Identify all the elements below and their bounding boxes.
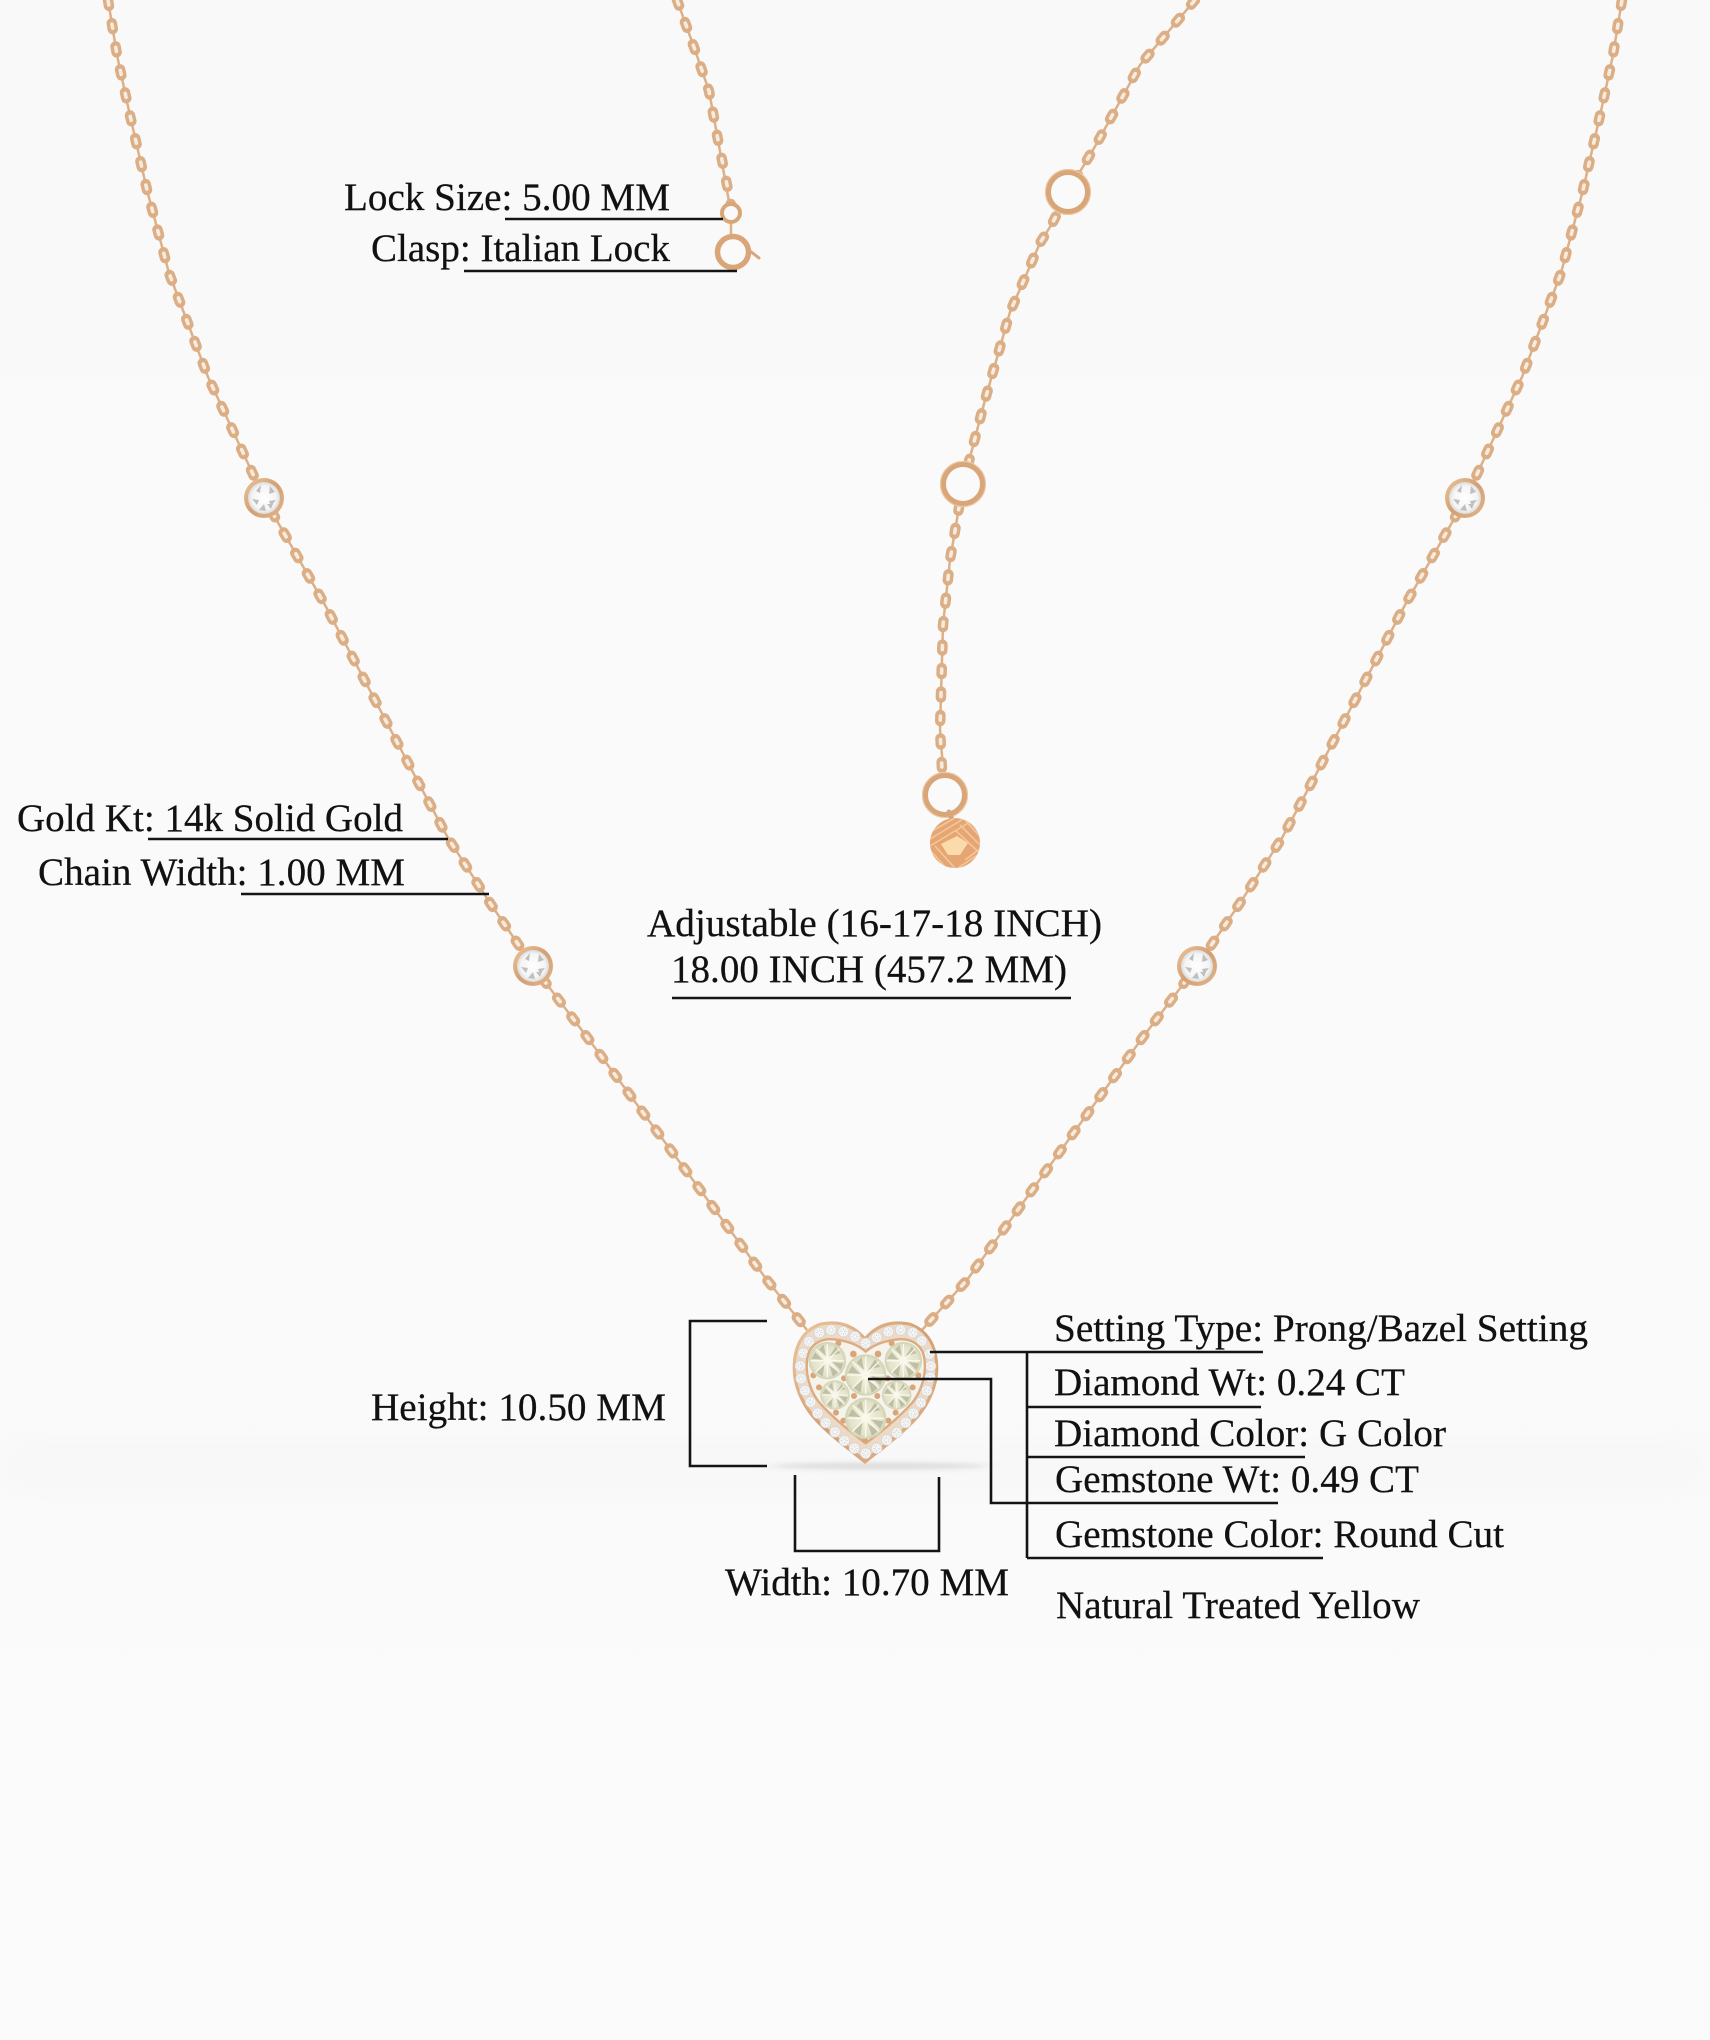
label: adjustable length: 18.00 INCH (457.2 MM) xyxy=(671,948,1067,991)
necklace specification infographic xyxy=(18,0,1628,1619)
bezel diamond: upper right xyxy=(1445,478,1485,518)
label: clasp: Clasp: Italian Lock xyxy=(371,227,670,270)
label: gemstone weight: Gemstone Wt: 0.49 CT xyxy=(1055,1458,1419,1501)
heart pendant xyxy=(793,1321,938,1464)
bezel diamond: lower left xyxy=(513,946,553,986)
icon: extender ring 1 xyxy=(1046,170,1090,214)
label: setting type: Setting Type: Prong/Bazel Setting xyxy=(1054,1307,1588,1350)
label: diamond weight: Diamond Wt: 0.24 CT xyxy=(1054,1361,1405,1404)
label: chain width: Chain Width: 1.00 MM xyxy=(38,851,405,894)
icon: extender ring 3 xyxy=(922,772,968,818)
icon: small jump ring at clasp xyxy=(722,204,740,222)
label: height with bracket: Height: 10.50 MM xyxy=(371,1386,666,1429)
label: width with bracket xyxy=(725,1475,1009,1604)
heart frame xyxy=(793,1321,938,1464)
icon: logo charm disc xyxy=(930,810,980,868)
icon: spring ring clasp xyxy=(718,236,759,268)
leader lines to setting and stones xyxy=(868,1352,1278,1558)
label: gemstone color: Gemstone Color: Round Cut xyxy=(1055,1513,1504,1556)
large gemstones xyxy=(809,1342,922,1439)
chain: clasp strand xyxy=(677,0,731,235)
label: natural treated yellow: Natural Treated Yellow xyxy=(1056,1584,1420,1627)
label: height with bracket xyxy=(371,1321,767,1466)
bezel diamond: lower right xyxy=(1177,946,1217,986)
prongs xyxy=(810,1340,921,1443)
label: lock size: Lock Size: 5.00 MM xyxy=(344,176,670,219)
halo of melee diamonds xyxy=(795,1324,936,1459)
chain: adjustable extender strand xyxy=(940,0,1195,795)
chain: left outer strand xyxy=(108,0,807,1330)
label: adjustable length: Adjustable (16-17-18 INCH) xyxy=(647,902,1102,945)
label: adjustable length xyxy=(647,902,1102,998)
pendant shadow xyxy=(772,1462,988,1470)
inner heart rim xyxy=(807,1339,925,1443)
label: gold karat: Gold Kt: 14k Solid Gold xyxy=(17,797,403,840)
icon: extender ring 2 xyxy=(940,462,986,506)
label: width with bracket: Width: 10.70 MM xyxy=(725,1561,1009,1604)
chain: right outer strand xyxy=(922,0,1622,1330)
label: diamond color: Diamond Color: G Color xyxy=(1054,1412,1446,1455)
bezel diamond: upper left xyxy=(244,478,284,518)
